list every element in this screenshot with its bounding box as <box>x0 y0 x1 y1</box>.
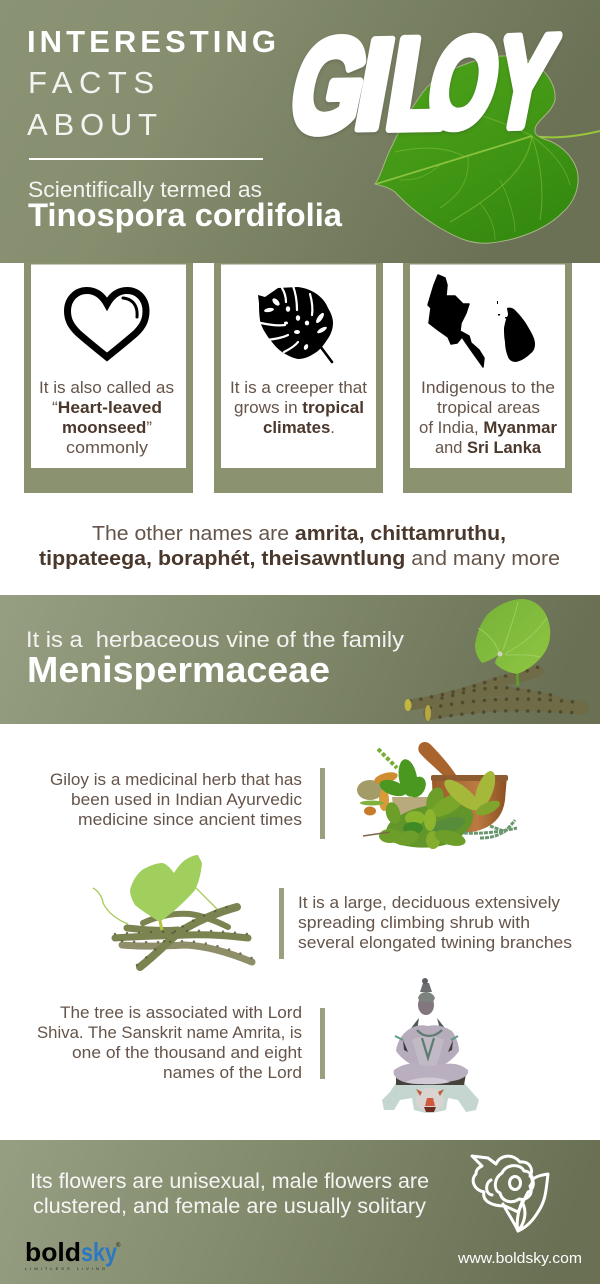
header title: interesting facts about <box>27 24 276 142</box>
text: creeper: grows in tropical <box>234 399 364 417</box>
text: indigenous: of India, Myanmar <box>419 419 558 437</box>
text: indigenous: tropical areas <box>437 399 540 417</box>
band: family menispermaceae <box>0 595 600 724</box>
text: indigenous: and Sri Lanka <box>435 439 542 457</box>
text: also called: “Heart-leaved <box>52 399 162 417</box>
image: giloy branches and leaf <box>93 855 252 967</box>
fact: medicinal herb <box>50 742 517 849</box>
figure <box>396 1074 466 1085</box>
icon: heart <box>68 290 146 357</box>
icon: monstera leaf <box>258 286 333 362</box>
title: giloy: G <box>279 13 380 160</box>
text: website: www.boldsky.com <box>457 1250 582 1267</box>
heading: herbaceous vine <box>26 627 404 690</box>
icon: map of myanmar <box>428 275 484 367</box>
header title: interesting facts about: ABOUT <box>27 107 157 142</box>
panel: heart-leaved moonseed <box>24 263 193 493</box>
text: medicinal herb: been used in Indian Ayurvedic <box>71 791 302 809</box>
text: flowers: Its flowers are unisexual, male flowers are <box>30 1170 429 1193</box>
text: medicinal herb: Giloy is a medicinal herb that has <box>50 771 302 789</box>
title: giloy: L <box>378 11 462 156</box>
icon: map of sri lanka <box>497 301 535 362</box>
logo: boldsky: ® <box>116 1242 121 1249</box>
text: also called: moonseed” <box>62 419 152 437</box>
image: mortar, pestle and herbs <box>357 742 517 849</box>
logo: boldsky: bold <box>25 1237 81 1267</box>
subtitle: scientific name: Tinospora cordifolia <box>28 197 342 233</box>
tiger skin <box>382 1083 479 1113</box>
panel: indigenous areas <box>403 263 572 493</box>
text: deciduous shrub <box>298 894 572 952</box>
title: giloy <box>279 9 566 160</box>
logo: boldsky <box>25 1237 121 1271</box>
header band <box>0 0 600 263</box>
text: lord shiva: Shiva. The Sanskrit name Amrita, is <box>37 1024 302 1042</box>
logo: boldsky: LIMITLESS LIVING <box>25 1266 105 1271</box>
text: indigenous: Indigenous to the <box>421 379 555 397</box>
subtitle: scientific name: Scientifically termed as <box>28 177 262 202</box>
icon: giloy leaf <box>375 56 600 243</box>
title: giloy: I <box>345 11 405 157</box>
text: lord shiva: one of the thousand and eight <box>72 1044 302 1062</box>
text: other names: tippateega, boraphét, theisawntlung and many more <box>39 548 560 570</box>
text: deciduous shrub: spreading climbing shrub with <box>298 914 530 932</box>
heading: herbaceous vine: Menispermaceae <box>27 649 330 690</box>
text: creeper: It is a creeper that <box>230 379 367 397</box>
text: deciduous shrub: several elongated twining branches <box>298 934 572 952</box>
fact: lord shiva <box>37 978 479 1113</box>
text: deciduous shrub: It is a large, deciduous extensively <box>298 894 561 912</box>
text: creeper <box>230 379 367 437</box>
text: lord shiva <box>37 1004 302 1082</box>
image: shiva statue <box>382 978 479 1113</box>
fact: deciduous shrub <box>93 855 572 967</box>
band: flowers <box>0 1140 600 1284</box>
title: giloy: Y <box>483 9 566 155</box>
subtitle: scientific name <box>28 177 342 233</box>
logo: boldsky: sky <box>81 1237 117 1267</box>
text: medicinal herb: medicine since ancient times <box>78 811 302 829</box>
text: lord shiva: The tree is associated with Lord <box>60 1004 302 1022</box>
panel: tropical climates <box>214 263 383 493</box>
title: giloy: O <box>417 11 511 155</box>
text: also called: It is also called as <box>39 379 174 397</box>
text: medicinal herb <box>50 771 302 829</box>
header title: interesting facts about: INTERESTING <box>27 24 276 59</box>
icon: flower <box>472 1156 548 1231</box>
text: other names: The other names are amrita, chittamruthu, <box>92 523 506 545</box>
text: other names <box>39 523 560 570</box>
text: indigenous <box>419 379 558 457</box>
header title: interesting facts about: FACTS <box>28 65 154 100</box>
text: lord shiva: names of the Lord <box>163 1064 302 1082</box>
image: vine stems and leaf <box>404 599 582 721</box>
text: also called <box>39 379 174 457</box>
text: flowers <box>30 1170 429 1218</box>
text: flowers: clustered, and female are usually solitary <box>33 1195 427 1218</box>
text: also called: commonly <box>66 439 149 457</box>
text: creeper: climates. <box>263 419 335 437</box>
heading: herbaceous vine: It is a herbaceous vine of the family <box>26 627 404 652</box>
